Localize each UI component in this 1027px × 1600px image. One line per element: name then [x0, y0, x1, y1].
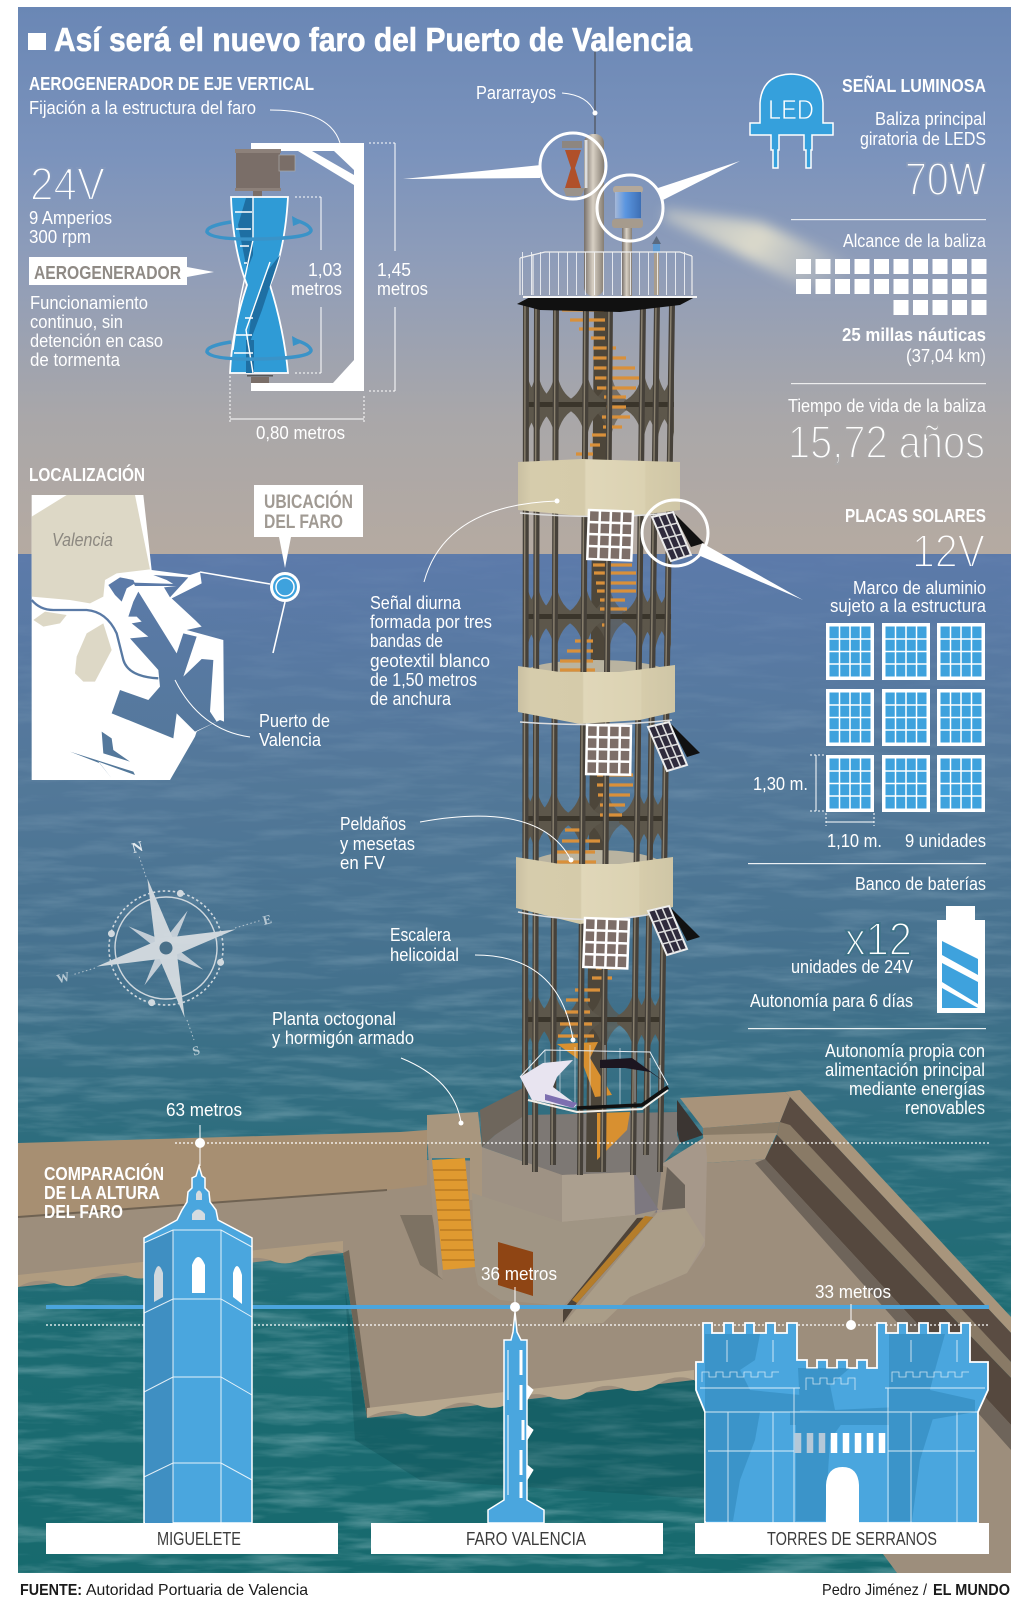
small pole [652, 236, 661, 295]
heading: comparación: DE LA ALTURA [44, 1183, 160, 1203]
tower: miguelete [144, 1166, 252, 1523]
pier floor [18, 1159, 1011, 1573]
dimension 0,80 [230, 376, 364, 443]
marco text: Marco de aluminio [853, 578, 986, 598]
autonomy text: Autonomía propia con [825, 1041, 985, 1061]
label aerogenerador [29, 257, 214, 285]
callout: escalera [390, 925, 576, 1042]
callout: señal diurna: geotextil blanco [370, 651, 490, 671]
dimension 1,45 [369, 143, 428, 391]
callout: peldaños [340, 814, 574, 873]
puerto label [175, 680, 330, 750]
solar panels front [583, 510, 633, 969]
lower wall [472, 1193, 657, 1306]
icon: LED [750, 74, 833, 168]
background: sky [18, 7, 1011, 554]
icon: battery [937, 906, 985, 1013]
beacon [612, 186, 643, 296]
callout: planta: y hormigón armado [272, 1028, 414, 1048]
label: miguelete: MIGUELETE [157, 1529, 241, 1549]
back walls [480, 1088, 525, 1147]
callout: planta: Planta octogonal [272, 1009, 396, 1029]
dimension panel height: 1,30 m. [753, 774, 808, 794]
heading: comparación [44, 1163, 164, 1222]
funcionamiento text: de tormenta [30, 350, 121, 370]
door [498, 1242, 533, 1296]
autonomy text [825, 1041, 985, 1118]
heading: SEÑAL LUMINOSA [842, 75, 986, 96]
marker 36 metros: 36 metros [481, 1264, 557, 1284]
marker 63 metros: 63 metros [166, 1100, 242, 1120]
tower: faro valencia [488, 1312, 544, 1523]
marker 33 metros [815, 1282, 891, 1330]
footer: fuente: Autoridad Portuaria de Valencia [86, 1582, 308, 1599]
callout ubicación: UBICACIÓN [264, 491, 353, 513]
funcionamiento text: Funcionamiento [30, 293, 148, 313]
value 70W: 70W [905, 153, 986, 205]
centre pier side [343, 1250, 371, 1418]
heading: PLACAS SOLARES [845, 506, 986, 526]
label: faro valencia [371, 1523, 663, 1554]
geotextile band 1 [518, 459, 680, 516]
range value: 25 millas náuticas [842, 325, 986, 345]
steps [556, 310, 639, 1036]
title: Así será el nuevo faro del Puerto de Valencia [54, 21, 693, 58]
lighthouse tower [507, 50, 704, 1175]
dimension panel width [826, 813, 882, 851]
pier and lighthouse base [18, 1088, 1011, 1573]
spandrels [507, 365, 691, 1060]
banco label: Banco de baterías [855, 874, 986, 894]
bracket [251, 143, 364, 391]
geotextile band 2 [518, 665, 675, 724]
heading: comparación: COMPARACIÓN [44, 1163, 164, 1184]
solar panel grid [826, 623, 985, 812]
marker 63 metros [166, 1100, 242, 1166]
light beam [664, 208, 880, 300]
label: torres de serranos: TORRES DE SERRANOS [767, 1529, 937, 1549]
label aerogenerador: AEROGENERADOR [34, 263, 181, 283]
callout: escalera: Escalera [390, 925, 452, 945]
left pier crease [18, 1189, 387, 1218]
units 24V: unidades de 24V [791, 957, 913, 977]
callout: peldaños: en FV [340, 853, 385, 873]
label: faro valencia: FARO VALENCIA [466, 1529, 586, 1549]
funcionamiento text: continuo, sin [30, 312, 123, 332]
amperios: 300 rpm [29, 227, 91, 247]
amperios: 9 Amperios [29, 208, 112, 228]
compass rose [55, 839, 273, 1059]
autonomy text: renovables [905, 1098, 985, 1118]
dimension 1,45: 1,45 [377, 260, 411, 280]
baliza text [860, 109, 986, 149]
dimension 1,03: metros [291, 279, 342, 299]
compass rose: S [191, 1042, 202, 1059]
fijacion leader [270, 110, 340, 143]
side ramp [563, 1208, 705, 1325]
callout: señal diurna [370, 498, 560, 709]
rotation arrows [207, 216, 311, 359]
lightning rod [594, 50, 596, 134]
motor [235, 149, 295, 383]
door [826, 1467, 859, 1523]
stair wall [427, 1140, 443, 1280]
footer: credit [822, 1582, 1010, 1599]
far side of bands [526, 660, 666, 886]
footer: credit: EL MUNDO [933, 1582, 1010, 1599]
fijacion text: Fijación a la estructura del faro [29, 98, 256, 118]
amperios [29, 208, 112, 247]
railing [520, 252, 692, 295]
funcionamiento text [30, 293, 163, 370]
compass rose: N [130, 839, 145, 857]
marker 33 metros: 33 metros [815, 1282, 891, 1302]
lifetime: 15,72 años [788, 416, 985, 468]
callout: señal diurna: formada por tres [370, 612, 492, 632]
stripes [798, 1433, 882, 1453]
funcionamiento text: detención en caso [30, 331, 163, 351]
callout: peldaños: Peldaños [340, 814, 406, 834]
dimension panel height [753, 755, 826, 811]
callout: peldaños: y mesetas [340, 834, 415, 854]
heading: LOCALIZACIÓN [29, 464, 145, 485]
geotextile band 3 [516, 857, 673, 924]
zoom circles [540, 133, 708, 566]
baliza text: giratoria de LEDS [860, 129, 986, 149]
dimension panel width: 1,10 m. [827, 831, 882, 851]
panel: aerogenerador [29, 74, 428, 443]
valencia label: Valencia [52, 530, 113, 550]
dimension 1,03 [291, 197, 342, 373]
callout: señal diurna: de 1,50 metros [370, 670, 477, 690]
baliza text: Baliza principal [875, 109, 986, 129]
autonomy: Autonomía para 6 días [750, 991, 913, 1011]
callout wedge: beacon [658, 161, 740, 200]
inner floor right [634, 1172, 660, 1215]
label: miguelete [46, 1523, 338, 1554]
callout: señal diurna: de anchura [370, 689, 452, 709]
callout: planta [272, 1009, 464, 1126]
comparison reference lines [46, 1143, 989, 1325]
marco text: sujeto a la estructura [830, 596, 987, 616]
panel: localización [29, 464, 363, 780]
range value [842, 325, 986, 366]
centre pier lip [367, 1370, 694, 1418]
turbine blades [230, 197, 288, 373]
orange stairs [432, 1158, 475, 1270]
right pier [680, 1090, 1011, 1450]
label: pararrayos [476, 83, 598, 116]
central core [586, 310, 608, 1172]
bottom platform with railing [520, 1045, 668, 1112]
label: pararrayos: Pararrayos [476, 83, 556, 103]
label: torres de serranos [695, 1523, 989, 1554]
footer: credit: Pedro Jiménez / [822, 1582, 928, 1599]
dimension 1,45: metros [377, 279, 428, 299]
top mast [584, 134, 604, 296]
left pier top surface [18, 1130, 427, 1217]
alcance label: Alcance de la baliza [843, 231, 987, 251]
bands rings [518, 513, 672, 920]
heading aerogenerador: AEROGENERADOR DE EJE VERTICAL [29, 74, 314, 94]
puerto label: Valencia [259, 730, 322, 750]
background: sea [18, 554, 1011, 1573]
map [32, 495, 224, 780]
dimension 0,80: 0,80 metros [256, 423, 345, 443]
callout wedge: turbine [403, 165, 541, 179]
units: 9 unidades [905, 831, 986, 851]
ramp stair [563, 1217, 653, 1323]
value x12: x12 [845, 913, 912, 965]
heading: comparación: DEL FARO [44, 1202, 123, 1222]
tower: torres de serranos [696, 1323, 988, 1523]
wind turbine mini [562, 140, 586, 196]
structure lines [700, 1340, 985, 1523]
footer: fuente: FUENTE: [20, 1582, 82, 1599]
location marker [270, 572, 300, 602]
lifetime [788, 396, 987, 468]
panel: placas solares [748, 506, 987, 1118]
autonomy text: alimentación principal [825, 1060, 985, 1080]
right block [657, 1137, 707, 1285]
lifetime: Tiempo de vida de la baliza [788, 396, 987, 416]
value 12V: 12V [912, 525, 985, 577]
breakwater lines [200, 572, 285, 653]
dimension 1,03: 1,03 [308, 260, 342, 280]
marco text [830, 578, 987, 616]
inner walls [482, 1147, 562, 1222]
left pier lip [18, 1241, 343, 1287]
autonomy text: mediante energías [849, 1079, 985, 1099]
lower spiral stair [557, 1042, 630, 1160]
solar panels angled [648, 512, 704, 955]
callout: señal diurna: Señal diurna [370, 593, 462, 613]
translucent patches [705, 1334, 975, 1521]
callout ubicación: DEL FARO [264, 512, 343, 533]
left block [427, 1112, 482, 1200]
range value: (37,04 km) [906, 346, 986, 366]
top platform [517, 296, 697, 312]
callout wedge: solar [698, 543, 803, 600]
columns [524, 304, 672, 1175]
compass rose: E [261, 911, 273, 928]
floor shadow by stairs [400, 1215, 443, 1280]
water shadow [345, 1290, 740, 1500]
callout: escalera: helicoidal [390, 945, 459, 965]
compass rose: W [55, 969, 71, 986]
range squares [796, 259, 986, 315]
puerto label: Puerto de [259, 711, 330, 731]
callout: señal diurna: bandas de [370, 631, 443, 651]
callout ubicación [254, 485, 363, 568]
value 24V: 24V [30, 158, 105, 210]
icon: LED: LED [768, 94, 814, 125]
panel: señal luminosa [750, 74, 987, 468]
marker 36 metros [481, 1264, 557, 1312]
